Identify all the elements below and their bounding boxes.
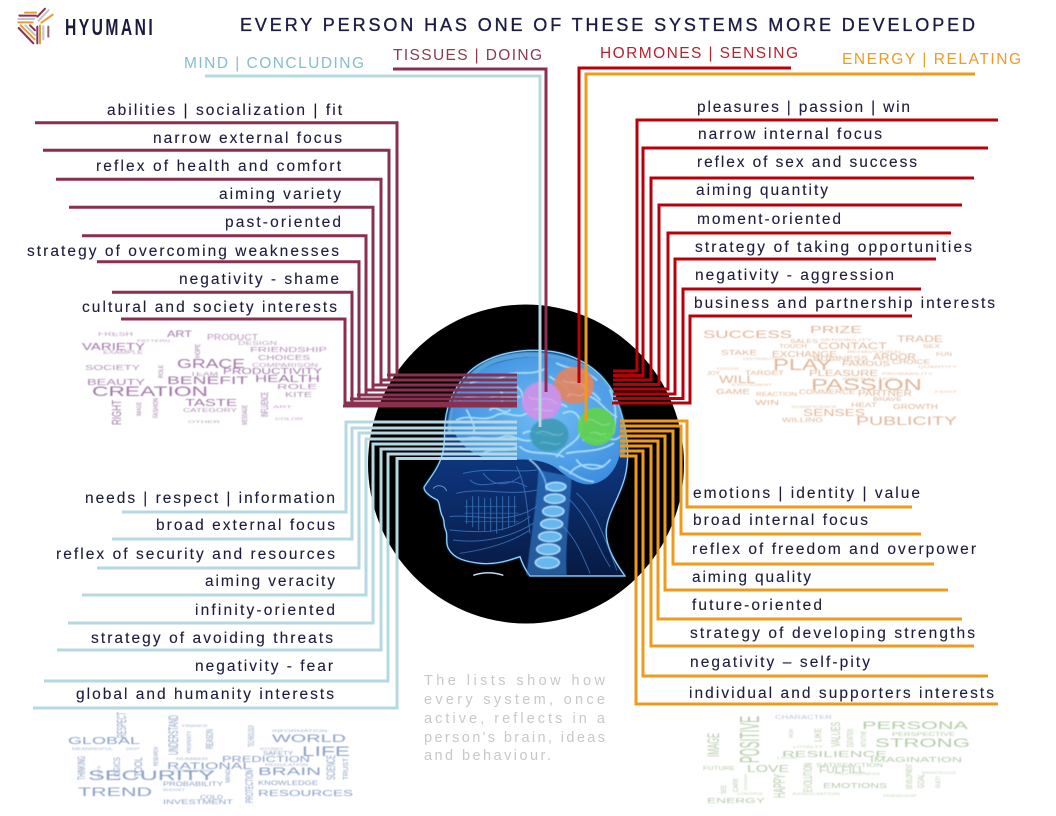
word cloud: hormones: REACTION <box>756 392 798 398</box>
word cloud: tissues: EXAMPLE <box>103 350 144 356</box>
list text: emotions | identity | value <box>693 485 920 502</box>
list text: reflex of sex and success <box>697 154 917 171</box>
word cloud: energy: STRONG <box>875 736 970 750</box>
word cloud: energy <box>703 715 970 805</box>
list connectors <box>620 421 998 704</box>
word cloud: hormones: CONTACT <box>818 341 888 351</box>
black circle <box>368 304 684 624</box>
list text: aiming veracity <box>205 573 335 590</box>
word cloud: tissues: ROLE <box>277 384 318 391</box>
word cloud: hormones: FUN <box>936 352 953 358</box>
list connectors <box>33 422 517 708</box>
word cloud: hormones: PROBABILITY <box>882 371 934 376</box>
word cloud: tissues: COMPARISON <box>252 363 319 369</box>
panel: mind concluding: RESPECT <box>114 712 129 738</box>
list text: negativity – self-pity <box>690 654 870 671</box>
title: EVERY PERSON HAS ONE OF THESE SYSTEMS MORE DEVELOPED <box>240 15 975 35</box>
list text: individual and supporters interests <box>689 685 994 702</box>
word cloud: hormones: CHOICE <box>892 360 930 366</box>
word cloud: tissues: ART <box>273 404 293 409</box>
list text: broad external focus <box>156 517 335 534</box>
brain folds <box>457 363 620 490</box>
word cloud: energy: EMOTIONS <box>823 783 888 790</box>
list text: aiming quality <box>692 569 811 586</box>
word cloud: mind: SAFETY <box>263 751 294 757</box>
list text <box>56 490 335 703</box>
word cloud: tissues: ART <box>167 329 193 339</box>
word cloud: hormones: FERVOR <box>717 366 739 371</box>
list text: broad internal focus <box>693 512 868 529</box>
list text: moment-oriented <box>697 211 841 228</box>
word cloud: mind: CONCLUDING <box>173 768 212 773</box>
list text: aiming variety <box>219 186 341 203</box>
word cloud: mind: MEANINGFUL <box>72 746 114 751</box>
word cloud: hormones: PASSION <box>811 377 922 394</box>
list text: narrow external focus <box>153 130 342 147</box>
word cloud: tissues: GRACE <box>177 356 245 371</box>
word cloud: energy: CHARACTER <box>775 715 833 721</box>
word cloud: hormones: GROWTH <box>893 404 938 411</box>
word cloud: tissues: RIGHT <box>109 400 124 425</box>
connector to brain <box>205 76 540 427</box>
connector to brain <box>586 74 975 422</box>
word cloud: energy: EVOLUTION <box>801 763 815 792</box>
list text <box>694 99 995 312</box>
icon: striped logo mark <box>18 9 53 43</box>
explanatory note: person's brain, ideas <box>424 730 605 746</box>
list text <box>689 485 994 702</box>
word cloud: energy: GOAL <box>916 774 926 788</box>
word cloud: mind: PROBABILITY <box>163 782 223 788</box>
explanatory note: and behaviour. <box>424 748 551 764</box>
list text: global and humanity interests <box>76 686 334 703</box>
word cloud: mind: DIGIT <box>126 746 141 751</box>
word cloud: hormones: PARTNER <box>858 389 912 398</box>
word cloud: energy: LOOK <box>777 755 798 760</box>
spine <box>527 470 572 575</box>
word cloud: energy: FUTURE <box>703 766 736 772</box>
header: hormones: HORMONES | SENSING <box>600 45 798 62</box>
word cloud: energy: PERSONA <box>862 720 969 732</box>
word cloud: mind: FINANCE <box>182 723 208 728</box>
list text: past-oriented <box>225 214 341 231</box>
connector to brain <box>579 68 791 383</box>
word cloud: mind: GLOBAL <box>68 736 141 747</box>
explanatory note: active, reflects in a <box>424 711 606 727</box>
word cloud: hormones: COMMERCE <box>799 390 855 396</box>
word cloud: energy: LOVE <box>747 764 790 775</box>
word cloud: energy: FRUITFULNESS <box>834 771 880 776</box>
word cloud: mind: PROPERTY <box>187 730 193 753</box>
logo <box>18 9 153 43</box>
brain illustration <box>368 304 684 624</box>
word cloud: mind: COLD <box>200 795 224 801</box>
list text: aiming quantity <box>696 182 828 199</box>
word cloud: energy: INTUITIVE <box>861 731 868 747</box>
word cloud: mind: TECHNOLOGY <box>247 725 256 747</box>
word cloud: tissues <box>82 329 328 425</box>
word cloud: energy: RIGHTEOUS <box>922 770 956 775</box>
list connectors <box>612 120 998 403</box>
word cloud: tissues: PRODUCTIVITY <box>223 367 323 376</box>
word cloud: mind: LIFE <box>302 743 350 759</box>
explanatory note: The lists show how <box>424 673 606 689</box>
word cloud: tissues: BENEFIT <box>167 375 248 387</box>
word cloud: energy: DEVELOPMENT <box>905 764 914 789</box>
word cloud: hormones: SIGNIFICANCE <box>791 404 838 409</box>
list connectors <box>35 123 517 406</box>
word cloud: hormones: GAME <box>716 389 751 396</box>
list text: strategy of avoiding threats <box>91 630 333 647</box>
word cloud: hormones: EXCHANGE <box>772 350 837 359</box>
word cloud: hormones: WILLING <box>782 418 824 424</box>
word cloud: hormones: STAKE <box>721 350 758 357</box>
word cloud: tissues: COLOR <box>275 416 303 421</box>
word cloud: tissues: KITE <box>285 392 313 399</box>
word cloud: hormones: WILL <box>719 374 755 386</box>
word cloud: mind: SCIENCE <box>324 755 338 780</box>
word cloud: energy: GUILTY <box>936 776 942 788</box>
panel: mind concluding: UNDERSTAND <box>165 715 181 755</box>
word cloud: energy: ENERGY <box>707 798 766 805</box>
word cloud: mind: SECURITY <box>88 767 216 783</box>
word cloud: energy: FULFILL <box>819 765 865 775</box>
head with brain <box>424 350 628 576</box>
panel: hormones sensing <box>579 45 998 428</box>
word cloud: energy: CARE <box>733 778 740 792</box>
word cloud: hormones: PLEASURE <box>809 369 878 378</box>
list text: negativity - fear <box>195 658 333 675</box>
colored zones <box>522 367 616 452</box>
panel: energy relating: POSITIVE <box>734 716 765 763</box>
word cloud: mind: WORLD <box>272 733 346 745</box>
word cloud: mind: LOGICS <box>112 757 122 780</box>
zone texture <box>528 380 610 444</box>
word cloud: hormones: SENSIBILITY <box>820 337 873 342</box>
word cloud: tissues: FRESH <box>98 332 133 338</box>
list text: strategy of taking opportunities <box>695 239 972 256</box>
panel: tissues doing <box>27 47 546 425</box>
word cloud: tissues: CHOICES <box>258 355 311 362</box>
word cloud: tissues: TASTE <box>185 398 238 409</box>
list text: negativity - aggression <box>695 267 894 284</box>
word cloud: hormones: SEX <box>923 344 941 350</box>
word cloud: hormones: BRAVE <box>873 397 903 403</box>
word cloud: hormones: FAMOUS <box>842 361 891 368</box>
list text: needs | respect | information <box>85 490 335 507</box>
word cloud: energy: SATISFACTION <box>816 763 884 769</box>
list text: negativity - shame <box>179 271 339 288</box>
word cloud: tissues: VARIETY <box>82 342 145 353</box>
word cloud: mind: RESOURCES <box>258 789 353 798</box>
word cloud: tissues: CREATION <box>92 383 208 399</box>
word cloud: hormones: QUANTITY <box>918 364 958 369</box>
word cloud: mind: BUDGET <box>163 787 186 792</box>
panel: mind concluding <box>33 55 540 806</box>
word cloud: mind: FACTS <box>96 766 101 780</box>
word cloud: tissues: TEAM <box>190 372 218 378</box>
word cloud: mind: REGULATION <box>265 762 308 767</box>
word cloud: hormones: SUCCESS <box>703 329 792 341</box>
word cloud: tissues: FASHION <box>153 398 160 418</box>
word cloud: mind: TREND <box>78 785 153 799</box>
word cloud: tissues: MESSAGE <box>242 405 249 425</box>
word cloud: mind: TOOL <box>133 757 145 777</box>
word cloud: hormones: BEHAVIOURAL <box>847 349 905 354</box>
word cloud: tissues: INFLUENCE <box>260 392 271 417</box>
word cloud: hormones: TOUCH <box>779 344 808 350</box>
word cloud: energy: VALUES <box>828 722 843 747</box>
word cloud: hormones: WIN <box>755 400 779 407</box>
header: energy: ENERGY | RELATING <box>842 51 1021 68</box>
list text: strategy of overcoming weaknesses <box>27 243 339 260</box>
word cloud: mind: KNOWLEDGE <box>258 781 318 787</box>
word cloud: mind: MIND <box>226 768 232 783</box>
brand name: HYUMANI <box>65 15 153 41</box>
connector to brain <box>393 69 546 392</box>
word cloud: energy: PERSPECTIVE <box>892 732 956 738</box>
word cloud: tissues: OTHER <box>188 419 220 424</box>
word cloud: energy: INTENTION <box>743 774 748 790</box>
list text: reflex of freedom and overpower <box>692 541 976 558</box>
word cloud: energy: RESILIENCE <box>782 750 887 759</box>
word cloud: hormones: EXCITEMENT <box>732 382 773 387</box>
word cloud: tissues: SOCIETY <box>85 365 141 372</box>
word cloud: hormones: TARGET <box>745 371 785 377</box>
face structures <box>433 467 617 573</box>
list text: future-oriented <box>692 597 822 614</box>
word cloud: mind: REASON <box>205 729 216 749</box>
word cloud: tissues: PATTERN <box>137 338 170 343</box>
word cloud: energy: FRIENDSHIP <box>883 793 917 798</box>
list text: narrow internal focus <box>698 126 882 143</box>
panel: energy relating <box>586 51 1021 805</box>
word cloud: mind: INFORMATION <box>272 728 327 733</box>
word cloud: hormones: SALES <box>790 339 819 345</box>
word cloud: hormones: PRIZE <box>810 325 863 336</box>
word cloud: hormones: TRADE <box>897 334 943 344</box>
word cloud: energy: IMAGE <box>704 733 723 757</box>
word cloud: hormones: BUSINESS <box>813 356 869 363</box>
list text: pleasures | passion | win <box>697 99 910 116</box>
word cloud: mind: ACCURACY <box>260 746 283 751</box>
word cloud: mind: PROTECTION <box>244 770 256 803</box>
word cloud: hormones: PUBLICITY <box>856 414 957 428</box>
list text <box>27 102 343 316</box>
list text: business and partnership interests <box>694 295 995 312</box>
word cloud: energy: LOYALTY <box>793 744 824 749</box>
word cloud: mind: RATIONAL <box>167 761 252 771</box>
word cloud: energy: IMAGINATION <box>870 757 962 764</box>
word cloud: hormones: ARDOR <box>873 352 917 362</box>
list text: reflex of security and resources <box>56 546 335 563</box>
word cloud: hormones: JOY <box>707 371 721 377</box>
word cloud: mind <box>68 712 353 806</box>
word cloud: tissues: FRIENDSHIP <box>250 347 328 354</box>
word cloud: hormones: DISTRIBUTION <box>743 356 785 361</box>
word cloud: mind: BRAIN <box>258 766 321 778</box>
word cloud: hormones: HEAT <box>851 403 878 409</box>
word cloud: mind: TRUST <box>343 757 350 780</box>
header: mind: MIND | CONCLUDING <box>184 55 364 72</box>
word cloud: energy: SEE <box>721 785 728 794</box>
word cloud: mind: THINKING <box>76 756 88 780</box>
word cloud: hormones: PLAY <box>773 357 832 374</box>
word cloud: tissues: DESIGN <box>238 341 278 347</box>
word cloud: hormones <box>703 325 958 428</box>
list text: reflex of health and comfort <box>96 158 342 175</box>
word cloud: energy: HAPPY <box>770 774 789 798</box>
word cloud: energy: ASSOCIATION <box>792 791 840 796</box>
word cloud: energy: WISH <box>789 729 795 738</box>
word cloud: tissues: IMAGE <box>137 402 143 416</box>
word cloud: energy: LIKE <box>813 728 823 742</box>
word cloud: tissues: PRODUCT <box>207 333 258 342</box>
word cloud: tissues: HOPE <box>195 344 202 358</box>
word cloud: mind: PREDICTION <box>222 755 310 764</box>
list text: infinity-oriented <box>195 602 335 619</box>
list text: abilities | socialization | fit <box>107 102 343 119</box>
word cloud: energy: CONTROL <box>737 791 765 796</box>
list text: cultural and society interests <box>82 299 337 316</box>
word cloud: mind: INVESTMENT <box>163 800 234 806</box>
word cloud: mind: RESEARCH <box>154 747 160 766</box>
word cloud: mind: NUMBER <box>176 756 208 761</box>
list text: strategy of developing strengths <box>690 625 975 642</box>
word cloud: hormones: SENSES <box>803 408 865 419</box>
word cloud: tissues: ROLE <box>159 365 165 378</box>
word cloud: hormones: FIGHT <box>935 389 958 394</box>
word cloud: energy: ELEVATION <box>846 729 855 747</box>
explanatory note: every system, once <box>424 692 605 708</box>
explanatory note <box>424 673 606 764</box>
word cloud: tissues: CATEGORY <box>183 408 238 414</box>
word cloud: hormones: INTERACTION <box>842 376 897 381</box>
header: tissues: TISSUES | DOING <box>393 47 542 64</box>
word cloud: tissues: HEALTH <box>255 374 320 385</box>
word cloud: tissues: BEAUTY <box>87 378 146 387</box>
